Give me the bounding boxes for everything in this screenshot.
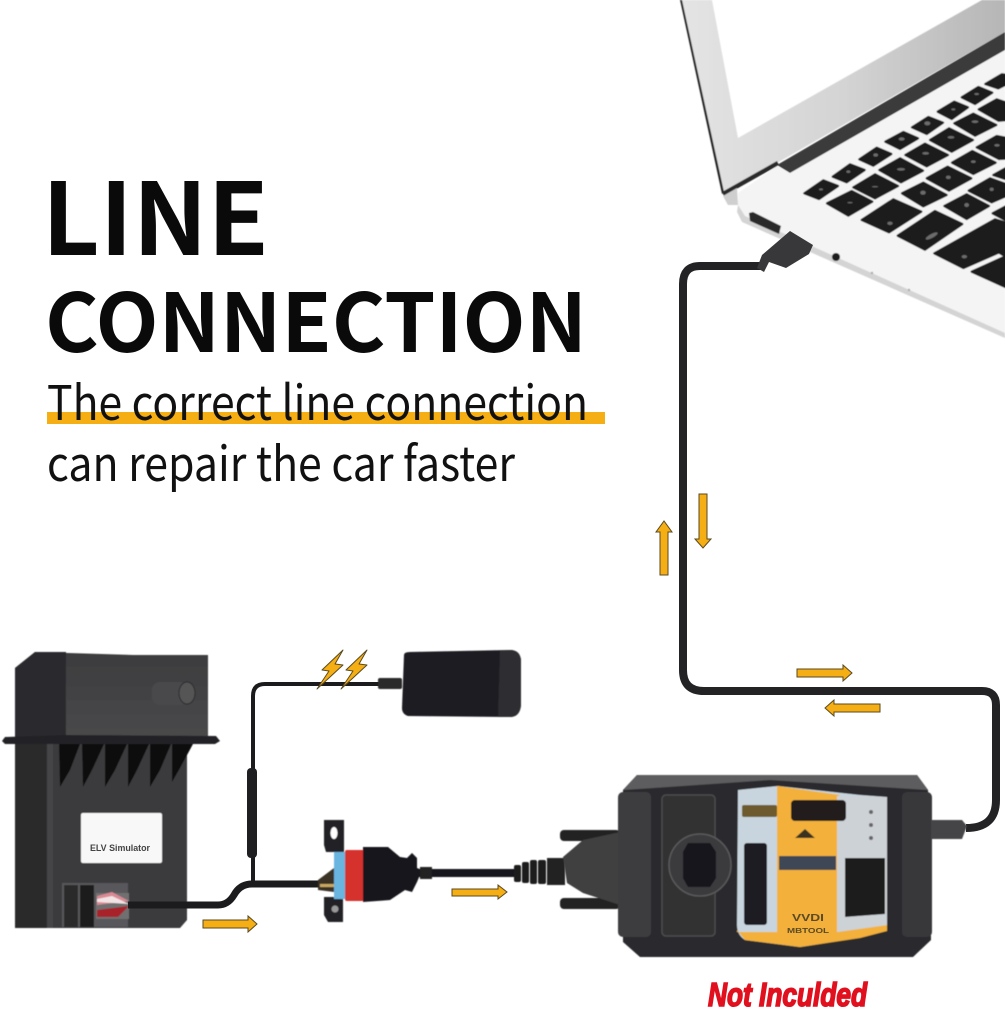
arrow: up: [656, 521, 672, 575]
USB port: [749, 212, 781, 234]
cable: laptop to programmer: [683, 266, 996, 828]
key legends: [819, 93, 1000, 258]
audio jack and indicator dots: [832, 253, 910, 291]
simulator body: [15, 652, 208, 928]
subtitle underline highlight: [47, 412, 605, 424]
title: LINE: LINE: [42, 139, 269, 284]
keyboard keys: [804, 74, 1005, 288]
arrow: right lower: [203, 916, 257, 932]
red shell: [345, 850, 364, 901]
power adapter: [378, 650, 521, 717]
simulator fins: [59, 744, 193, 787]
USB plug: [757, 231, 813, 272]
left connector: [744, 843, 767, 925]
side pads: [618, 792, 651, 937]
body: [623, 775, 931, 957]
blue plate: [334, 852, 345, 899]
mounting brackets: [324, 820, 344, 852]
cable: power branch: [253, 684, 384, 884]
subtitle line one: The correct line connection: [47, 364, 588, 434]
right port: [845, 858, 885, 917]
arrow: left: [825, 700, 880, 716]
OBD connector: [318, 820, 565, 922]
arrow: right cable: [452, 885, 507, 899]
laptop hinge: [777, 32, 1005, 173]
MBTOOL text: MBTOOL: [787, 928, 830, 935]
VVDI programmer: [560, 775, 967, 957]
wires: [318, 868, 334, 892]
arrow: down: [695, 494, 711, 548]
top connector: [791, 800, 846, 821]
simulator label: [81, 813, 162, 863]
cable: simulator to OBD connector: [128, 884, 322, 905]
lightning bolts: [317, 650, 367, 689]
status dots: [869, 810, 873, 840]
cable socket: [931, 820, 967, 839]
laptop: [680, 0, 1005, 338]
VVDI logo text: VVDI: [792, 913, 824, 924]
strain relief: [514, 865, 521, 882]
arrow: right top: [797, 665, 852, 681]
simulator label text: ELV Simulator: [90, 843, 150, 853]
small connector: [742, 805, 777, 817]
DB plug: [560, 830, 620, 841]
simulator flange: [2, 735, 220, 744]
ELV simulator: [2, 652, 220, 928]
middle pin row: [779, 856, 836, 870]
triangle mark: [795, 829, 815, 838]
barrel connector: [247, 768, 257, 858]
black shell: [363, 847, 422, 902]
panel: [737, 786, 887, 947]
simulator knob: [152, 682, 188, 705]
laptop lid: [681, 0, 1005, 194]
cable to programmer: [418, 869, 518, 877]
round socket: [669, 834, 731, 896]
title: CONNECTION: CONNECTION: [45, 259, 587, 376]
simulator connector: [62, 883, 128, 927]
subtitle line two: can repair the car faster: [47, 425, 515, 495]
laptop base: [738, 50, 1005, 336]
recessed area: [662, 795, 715, 936]
